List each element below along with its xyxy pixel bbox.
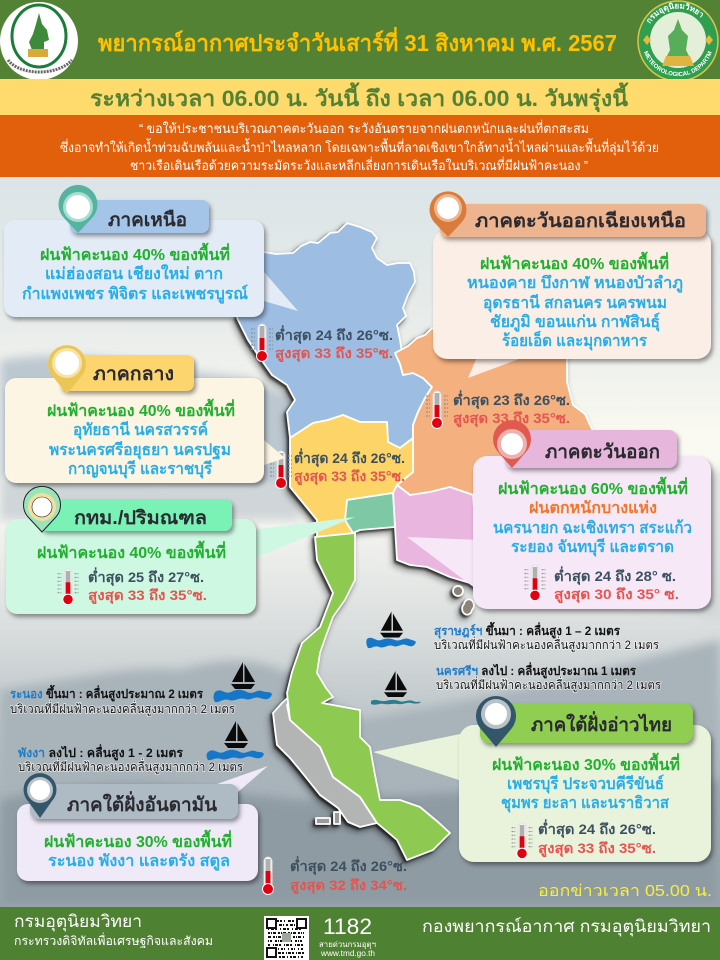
panel: east: ภาคตะวันออก xyxy=(545,442,660,463)
hotline: สายด่วนกรมอุตุฯ xyxy=(319,940,376,949)
icon: pin xyxy=(476,696,516,747)
panel: east: ต่ำสุด 24 ถึง 28° ซ. xyxy=(554,566,676,585)
icon: thermometer xyxy=(512,823,532,859)
time band: ระหว่างเวลา 06.00 น. วันนี้ ถึง เวลา 06.00 น. วันพรุ่งนี้ xyxy=(90,82,629,113)
sea: Surat Thani: บริเวณที่มีฝนฟ้าคะนองคลื่นสูงมากกว่า 2 เมตร xyxy=(434,636,660,653)
panel: central: ภาคกลาง xyxy=(93,364,174,385)
icon: boat and waves xyxy=(206,721,264,760)
panel: northeast xyxy=(430,191,711,378)
icon: thermometer xyxy=(525,565,545,601)
temperature: northeast: สูงสุด 33 ถึง 35°ซ. xyxy=(453,410,570,427)
map region: central xyxy=(290,415,413,537)
temperature: Andaman: สูงสุด 32 ถึง 34°ซ. xyxy=(290,877,407,894)
sea: Nakhon Si Thammarat: นครศรีฯ ลงไป : คลื่นสูงประมาณ 1 เมตร xyxy=(436,662,637,679)
header band xyxy=(0,0,720,79)
icon: pin xyxy=(430,191,467,237)
panel: east: ฝนฟ้าคะนอง 60% ของพื้นที่ xyxy=(498,476,688,498)
panel: north: ภาคเหนือ xyxy=(108,209,187,231)
panel: northeast: หนองคาย บึงกาฬ หนองบัวลำภู xyxy=(467,274,683,294)
hotline: www.tmd.go.th xyxy=(320,949,375,958)
hotline: 1182 xyxy=(323,914,372,939)
footer: department: กระทรวงดิจิทัลเพื่อเศรษฐกิจและสังคม xyxy=(14,932,213,948)
icon: boat and waves xyxy=(366,612,416,648)
map: eastern islands xyxy=(453,586,474,615)
panel: northeast: อุดรธานี สกลนคร นครพนม xyxy=(483,293,667,313)
icon: pin xyxy=(493,420,531,468)
footer xyxy=(0,907,720,960)
panel: Bangkok and vicinity: ต่ำสุด 25 ถึง 27°ซ. xyxy=(88,567,204,586)
temperature: north: ต่ำสุด 24 ถึง 26°ซ. xyxy=(275,325,393,344)
sea: Surat Thani xyxy=(366,612,660,653)
panel: north: แม่ฮ่องสอน เชียงใหม่ ตาก xyxy=(45,264,223,283)
panel: east: นครนายก ฉะเชิงเทรา สระแก้ว xyxy=(493,519,692,537)
logo: Ministry of Digital Economy and Society xyxy=(0,2,78,80)
map region: Andaman coast xyxy=(273,693,377,827)
panel: east: สูงสุด 30 ถึง 35° ซ. xyxy=(554,586,679,603)
warning band: ชาวเรือเดินเรือด้วยความระมัดระวังและหลีกเลี่ยงการเดินเรือในบริเวณที่มีฝนฟ้าคะนอง ” xyxy=(130,157,588,173)
icon: pin xyxy=(48,345,86,394)
map region: east xyxy=(393,485,480,590)
panel: Andaman coast: ระนอง พังงา และตรัง สตูล xyxy=(48,852,230,872)
sea: Nakhon Si Thammarat: บริเวณที่มีฝนฟ้าคะนองคลื่นสูงมากกว่า 2 เมตร xyxy=(436,676,662,693)
map region: northeast xyxy=(395,328,600,495)
panel: northeast: ชัยภูมิ ขอนแก่น กาฬสินธุ์ xyxy=(490,312,660,333)
panel: east: ระยอง จันทบุรี และตราด xyxy=(511,537,674,557)
temperature: central: สูงสุด 33 ถึง 35°ซ. xyxy=(294,468,405,485)
issue time: ออกข่าวเวลา 05.00 น. xyxy=(538,883,712,900)
icon: boat and waves xyxy=(371,671,421,705)
panel: Bangkok and vicinity: ฝนฟ้าคะนอง 40% ของพื้นที่ xyxy=(37,540,226,562)
logo: Meteorological Department xyxy=(637,0,719,79)
map region: Bangkok and vicinity xyxy=(345,493,395,533)
panel: Gulf coast south: สูงสุด 33 ถึง 35°ซ. xyxy=(538,840,656,857)
panel: Gulf coast south: ชุมพร ยะลา และนราธิวาส xyxy=(501,794,669,813)
warning band: ซึ่งอาจทำให้เกิดน้ำท่วมฉับพลันและน้ำป่าไหลหลาก โดยเฉพาะพื้นที่ลาดเชิงเขาใกล้ทางน้ำไหลผ่านและพื้นที่ลุ่มไว้ด้วย xyxy=(60,138,659,156)
temperature: Andaman: ต่ำสุด 24 ถึง 26°ซ. xyxy=(290,856,407,875)
panel: east: ฝนตกหนักบางแห่ง xyxy=(529,499,657,517)
footer: department: กรมอุตุนิยมวิทยา xyxy=(14,912,142,932)
temperature: north: สูงสุด 33 ถึง 35°ซ. xyxy=(275,345,393,362)
map region: north xyxy=(237,223,432,448)
temperature: central: ต่ำสุด 24 ถึง 26°ซ. xyxy=(294,448,405,467)
temperature: central xyxy=(270,448,405,488)
panel: Gulf coast south: ภาคใต้ฝั่งอ่าวไทย xyxy=(531,711,672,736)
panel: Andaman coast xyxy=(17,766,268,881)
panel: Bangkok and vicinity: สูงสุด 33 ถึง 35°ซ. xyxy=(88,587,207,604)
temperature: northeast xyxy=(426,390,570,428)
temperature: north xyxy=(251,324,393,362)
QR code xyxy=(264,916,309,960)
icon: thermometer xyxy=(58,569,78,605)
panel: north xyxy=(4,185,298,317)
icon: boat and waves xyxy=(214,662,272,702)
sea: Ranong: บริเวณที่มีฝนฟ้าคะนองคลื่นสูงมากกว่า 2 เมตร xyxy=(10,700,236,717)
panel: Gulf coast south: ฝนฟ้าคะนอง 30% ของพื้นที่ xyxy=(492,752,680,774)
panel: northeast: ฝนฟ้าคะนอง 40% ของพื้นที่ xyxy=(480,251,669,273)
panel: central: ฝนฟ้าคะนอง 40% ของพื้นที่ xyxy=(47,398,235,420)
temperature: northeast: ต่ำสุด 23 ถึง 26°ซ. xyxy=(453,390,570,409)
footer: department xyxy=(14,912,213,948)
panel: north: ฝนฟ้าคะนอง 40% ของพื้นที่ xyxy=(40,242,230,264)
sea: Ranong: ระนอง ขึ้นมา : คลื่นสูงประมาณ 2 เมตร xyxy=(10,684,204,702)
sea: Phang-nga: พังงา ลงไป : คลื่นสูง 1 - 2 เมตร xyxy=(18,744,184,761)
panel: central xyxy=(5,345,285,483)
panel: Andaman coast: ภาคใต้ฝั่งอันดามัน xyxy=(67,791,217,816)
sea: Surat Thani: สุราษฎร์ฯ ขึ้นมา : คลื่นสูง 1 – 2 เมตร xyxy=(434,621,621,639)
warning band: “ ขอให้ประชาชนบริเวณภาคตะวันออก ระวังอันตรายจากฝนตกหนักและฝนที่ตกสะสม xyxy=(139,120,589,136)
logo: Meteorological Department: กรมอุตุนิยมวิทยา xyxy=(647,2,704,24)
panel: Andaman coast: ฝนฟ้าคะนอง 30% ของพื้นที่ xyxy=(44,829,232,851)
footer: forecast division: กองพยากรณ์อากาศ กรมอุตุนิยมวิทยา xyxy=(422,917,711,937)
icon: pin xyxy=(58,185,97,233)
time band xyxy=(0,79,720,115)
panel: Bangkok and vicinity: กทม./ปริมณฑล xyxy=(74,508,207,529)
panel: central: กาญจนบุรี และราชบุรี xyxy=(68,459,212,479)
icon: pin xyxy=(24,773,56,818)
panel: central: อุทัยธานี นครสวรรค์ xyxy=(73,420,208,440)
map region: Gulf coast south xyxy=(287,533,450,860)
sea: Phang-nga xyxy=(18,721,264,775)
panel: northeast: ร้อยเอ็ด และมุกดาหาร xyxy=(502,329,647,351)
panel: Gulf coast south: ต่ำสุด 24 ถึง 26°ซ. xyxy=(538,819,656,838)
title: พยากรณ์อากาศประจำวันเสาร์ที่ 31 สิงหาคม พ.ศ. 2567 xyxy=(98,26,617,56)
warning band xyxy=(0,115,720,177)
panel: east xyxy=(407,420,711,609)
panel: Bangkok and vicinity xyxy=(6,486,355,614)
map: southern islands xyxy=(316,812,340,824)
panel: Gulf coast south: เพชรบุรี ประจวบคีรีขันธ์ xyxy=(507,774,664,794)
icon: pin xyxy=(24,486,60,532)
panel: central: พระนครศรีอยุธยา นครปฐม xyxy=(49,440,231,460)
panel: north: กำแพงเพชร พิจิตร และเพชรบูรณ์ xyxy=(22,284,248,305)
hotline xyxy=(319,914,376,958)
temperature: Andaman xyxy=(257,856,407,894)
background: misty mountains xyxy=(0,177,720,907)
panel: northeast: ภาคตะวันออกเฉียงเหนือ xyxy=(475,210,686,232)
sea: Phang-nga: บริเวณที่มีฝนฟ้าคะนองคลื่นสูงมากกว่า 2 เมตร xyxy=(18,758,244,775)
panel: Gulf coast south xyxy=(373,696,711,862)
sea: Ranong xyxy=(10,662,272,717)
sea: Nakhon Si Thammarat xyxy=(371,662,662,705)
map of Thailand xyxy=(237,223,600,860)
